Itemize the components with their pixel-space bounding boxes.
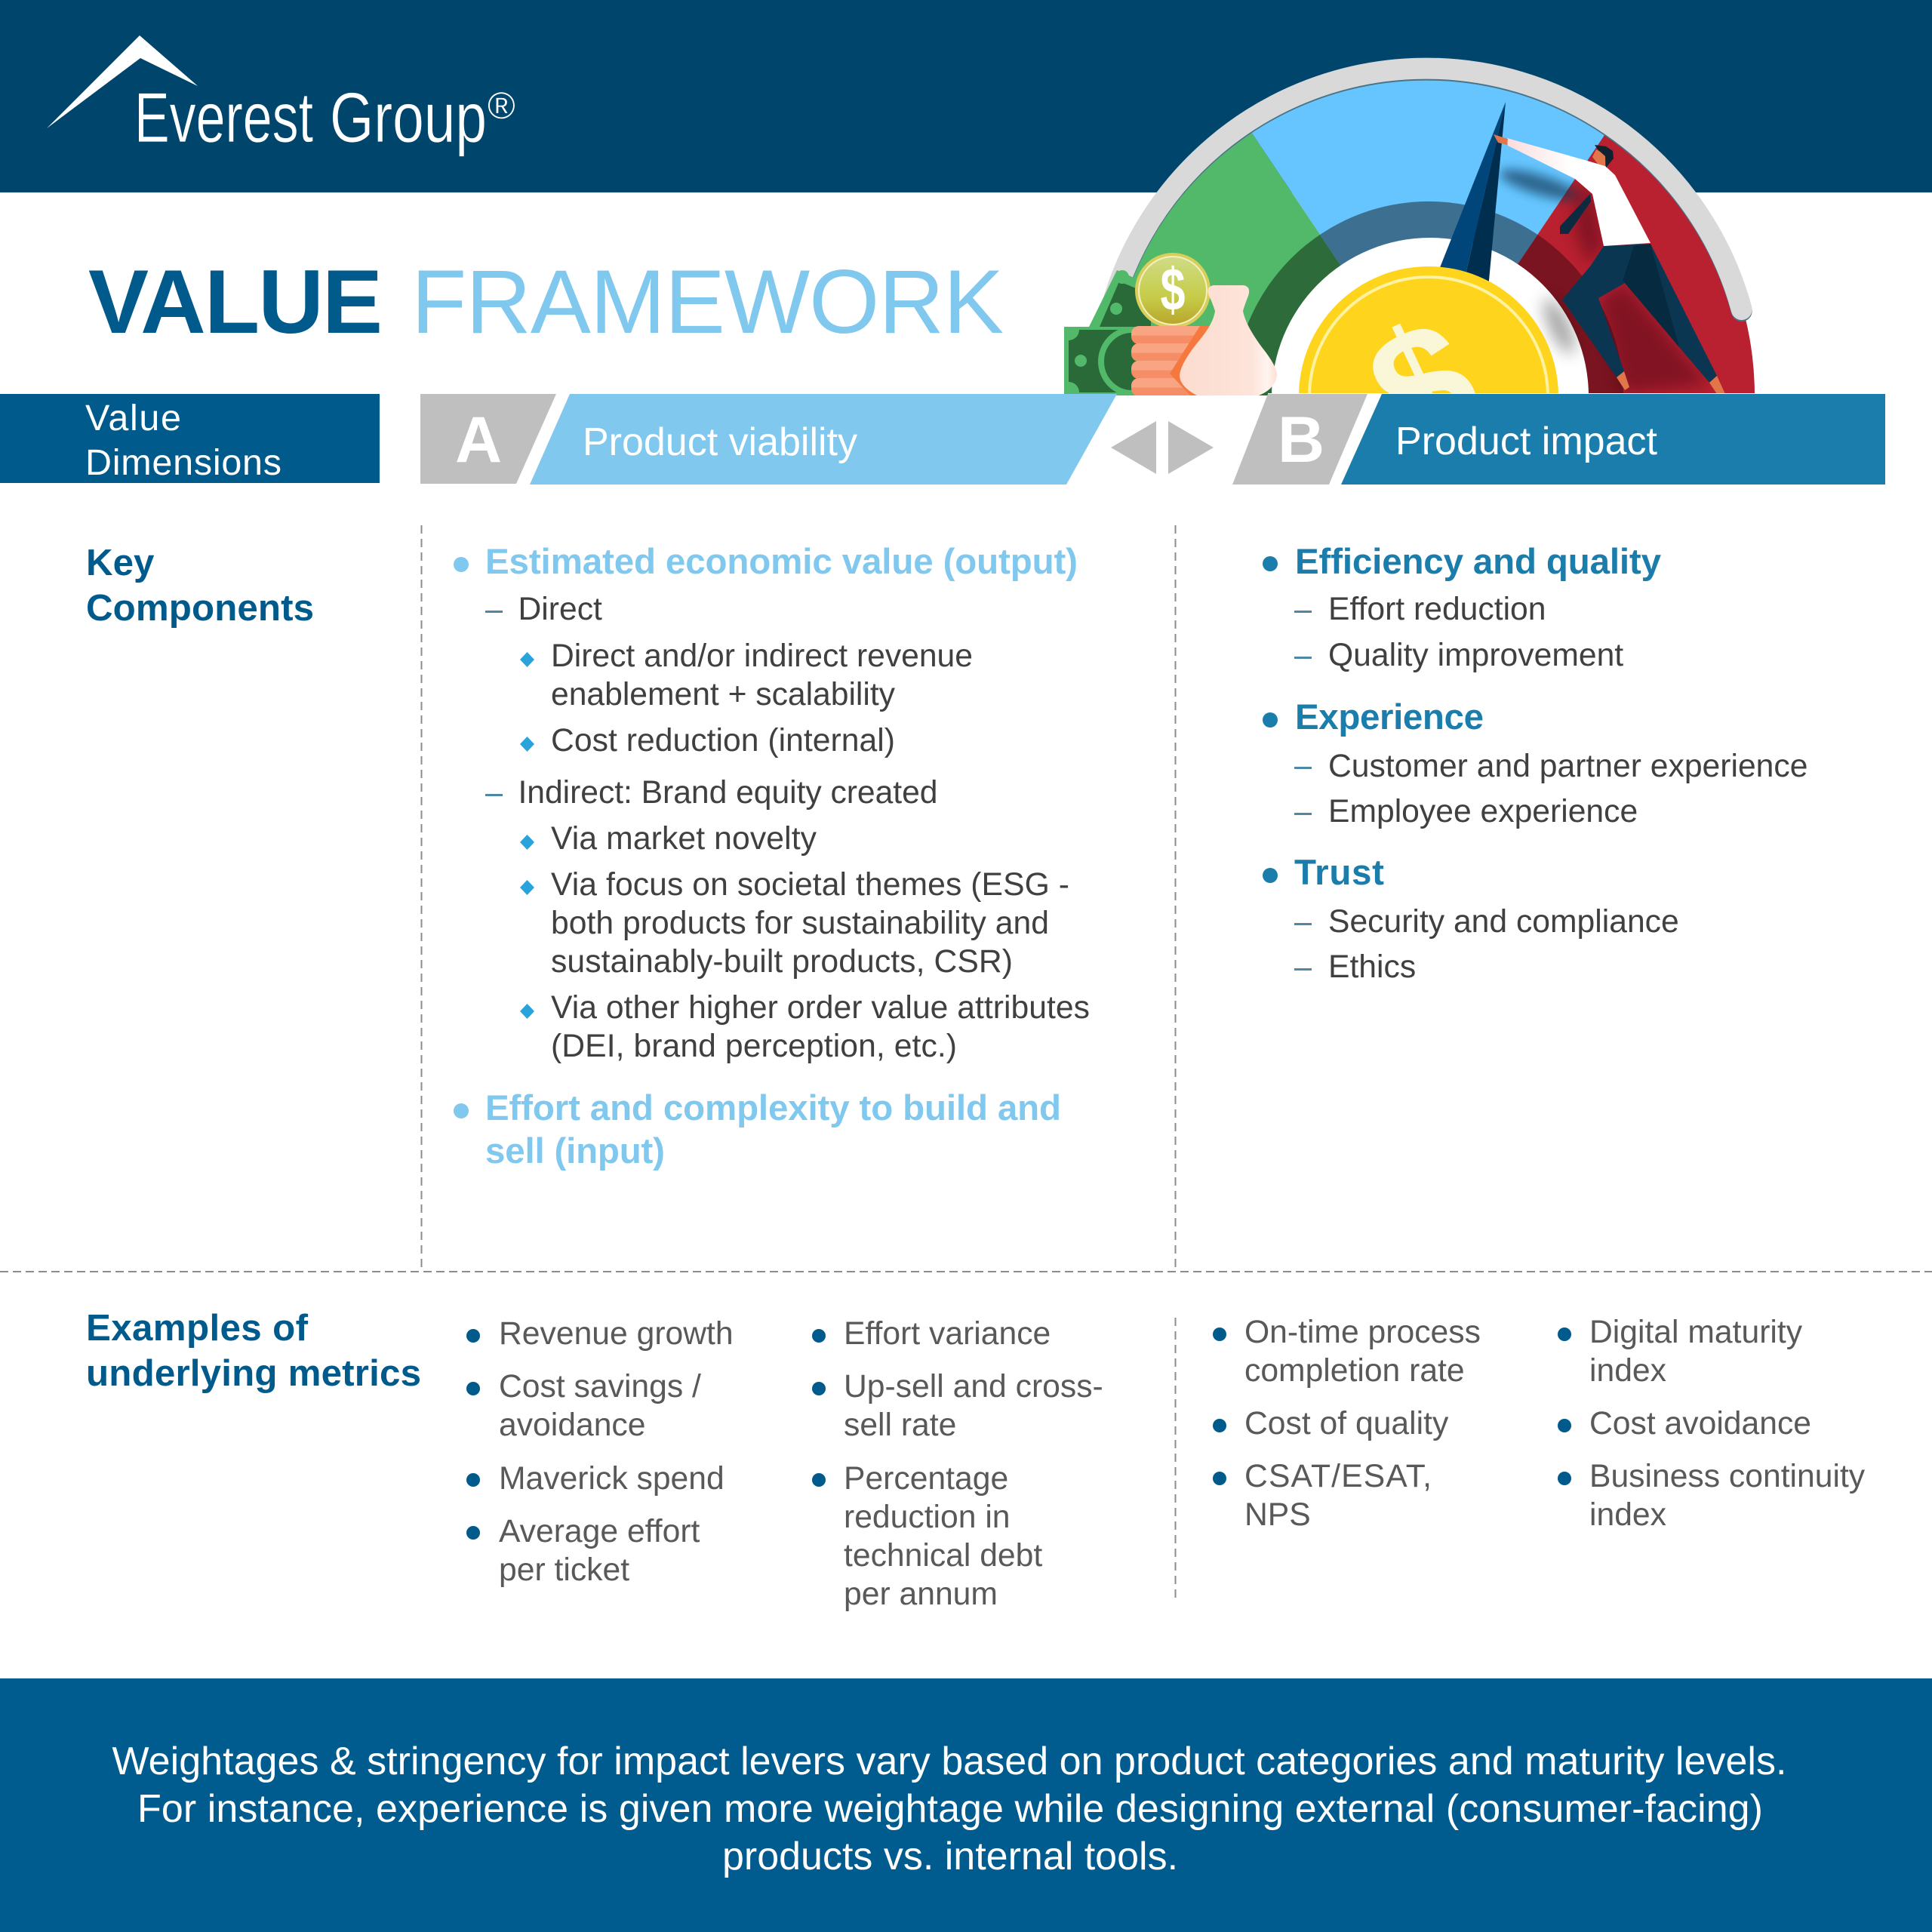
businessman bbox=[1494, 134, 1725, 394]
logo: Everest Group bbox=[47, 35, 515, 157]
logo wordmark: Everest bbox=[134, 78, 313, 157]
metric: csat bbox=[1213, 1458, 1432, 1533]
footer callout bbox=[0, 1678, 1932, 1932]
shoes bbox=[1617, 371, 1629, 390]
metric: csat: CSAT/ESAT, bbox=[1244, 1458, 1432, 1494]
metric: up-sell: Up-sell and cross- bbox=[844, 1368, 1103, 1404]
item: other attributes: (DEI, brand perception, etc.) bbox=[551, 1028, 957, 1064]
item: customer experience: Customer and partner experience bbox=[1328, 748, 1807, 784]
panel: viability metrics column 2 bbox=[812, 1315, 1103, 1612]
metric: up-sell: sell rate bbox=[844, 1407, 956, 1443]
key components label: Key bbox=[86, 542, 155, 583]
metric: average effort bbox=[466, 1513, 700, 1588]
value dimensions label: Dimensions bbox=[85, 442, 281, 483]
item: societal themes: both products for sustainability and bbox=[551, 905, 1049, 941]
item: security: Security and compliance bbox=[1328, 903, 1679, 940]
heading: efficiency and quality: Efficiency and quality bbox=[1295, 542, 1662, 582]
key components label bbox=[86, 542, 314, 629]
metric: on-time process: On-time process bbox=[1244, 1314, 1481, 1350]
key components label: Components bbox=[86, 587, 314, 629]
metric: business continuity: Business continuity bbox=[1589, 1458, 1866, 1494]
logo wordmark bbox=[134, 78, 487, 157]
gauge sector: blue bbox=[1251, 80, 1604, 235]
title bbox=[88, 251, 1004, 352]
banner: product viability bbox=[530, 394, 1117, 485]
item: employee experience: Employee experience bbox=[1328, 793, 1638, 829]
footer callout: For instance, experience is given more weightage while designing external (consumer-facing) bbox=[137, 1787, 1763, 1831]
face bbox=[1592, 149, 1605, 166]
title: FRAMEWORK bbox=[411, 251, 1004, 352]
dimension B: product impact bbox=[1232, 394, 1885, 485]
metric: cost avoidance: Cost avoidance bbox=[1589, 1405, 1811, 1441]
examples of metrics label: Examples of bbox=[86, 1307, 309, 1349]
panel: impact metrics column 2 bbox=[1558, 1314, 1866, 1533]
illustration: speedometer gauge with businessman bbox=[1064, 57, 1755, 395]
heading: estimated economic value: Estimated economic value (output) bbox=[485, 542, 1078, 582]
examples of metrics label: underlying metrics bbox=[86, 1352, 421, 1394]
heading: effort and complexity: sell (input) bbox=[485, 1131, 665, 1171]
metric: technical debt: Percentage bbox=[844, 1460, 1008, 1497]
footer callout: products vs. internal tools. bbox=[722, 1835, 1178, 1878]
hair bbox=[1595, 145, 1614, 168]
legs bbox=[1562, 244, 1717, 383]
registered mark: ® bbox=[488, 85, 515, 127]
metric: technical debt: technical debt bbox=[844, 1537, 1042, 1574]
item: other attributes bbox=[520, 989, 1090, 1064]
heading: effort and complexity bbox=[454, 1088, 1061, 1171]
metric: technical debt: per annum bbox=[844, 1576, 998, 1612]
badge A: A bbox=[455, 404, 502, 476]
metric: average effort: per ticket bbox=[499, 1552, 629, 1588]
metric: up-sell bbox=[812, 1368, 1103, 1443]
metric: effort variance: Effort variance bbox=[844, 1315, 1051, 1352]
metric: on-time process: completion rate bbox=[1244, 1352, 1465, 1389]
panel: impact metrics column 1 bbox=[1213, 1314, 1481, 1533]
torso and arm bbox=[1507, 138, 1651, 246]
icon: mountain peak bbox=[47, 35, 198, 128]
gauge inner band bbox=[1234, 202, 1623, 396]
panel: viability metrics column 1 bbox=[466, 1315, 734, 1588]
item: revenue enablement: Direct and/or indirect revenue bbox=[551, 638, 973, 674]
metric: cost of quality: Cost of quality bbox=[1244, 1405, 1449, 1441]
footer callout: Weightages & stringency for impact levers vary based on product categories and maturity levels. bbox=[112, 1740, 1787, 1783]
small dollar coin: $ bbox=[1161, 256, 1185, 323]
item: market novelty: Via market novelty bbox=[551, 820, 817, 857]
hub shadow bbox=[1539, 295, 1580, 357]
metric: digital maturity: Digital maturity bbox=[1589, 1314, 1803, 1350]
metric: technical debt bbox=[812, 1460, 1042, 1612]
logo wordmark: Group bbox=[330, 78, 487, 157]
badge A bbox=[420, 394, 556, 484]
metric: maverick spend: Maverick spend bbox=[499, 1460, 724, 1497]
metric: cost savings: Cost savings / bbox=[499, 1368, 701, 1404]
item: revenue enablement: enablement + scalability bbox=[551, 676, 896, 712]
item: indirect: Indirect: Brand equity created bbox=[518, 774, 937, 811]
dimension A: product viability bbox=[420, 394, 1117, 485]
hand bbox=[1494, 134, 1508, 145]
leg shading bbox=[1623, 244, 1679, 347]
metric: business continuity: index bbox=[1589, 1497, 1666, 1533]
item: societal themes: sustainably-built products, CSR) bbox=[551, 943, 1013, 980]
metric: csat: NPS bbox=[1244, 1497, 1311, 1533]
gold coin: $ bbox=[1343, 281, 1505, 489]
gold coin bbox=[1299, 266, 1558, 393]
item: cost reduction: Cost reduction (internal) bbox=[551, 722, 895, 758]
tie bbox=[1560, 194, 1591, 234]
examples of metrics label bbox=[86, 1307, 421, 1394]
item: societal themes bbox=[520, 866, 1069, 980]
panel: product viability components bbox=[454, 542, 1090, 1171]
item: effort reduction: Effort reduction bbox=[1328, 591, 1546, 627]
item: direct: Direct bbox=[518, 591, 602, 627]
gauge white hub bbox=[1272, 238, 1589, 393]
heading: effort and complexity: Effort and complexity to build and bbox=[485, 1088, 1061, 1128]
item: societal themes: Via focus on societal themes (ESG - bbox=[551, 866, 1069, 903]
heading: experience: Experience bbox=[1295, 697, 1484, 737]
title: VALUE bbox=[88, 251, 383, 352]
double arrows between dimensions bbox=[1111, 421, 1214, 474]
metric: on-time process bbox=[1213, 1314, 1481, 1389]
gauge grey rim bbox=[1106, 69, 1742, 332]
banner: product impact bbox=[1341, 394, 1885, 485]
metric: cost savings: avoidance bbox=[499, 1407, 645, 1443]
gauge sector: green bbox=[1134, 133, 1340, 326]
arm shadow bbox=[1497, 163, 1582, 207]
gauge sector: red bbox=[1518, 136, 1755, 393]
banner: product viability: Product viability bbox=[583, 420, 857, 464]
badge B bbox=[1232, 394, 1367, 485]
heading: trust: Trust bbox=[1294, 853, 1384, 893]
header band bbox=[0, 0, 1932, 192]
item: quality improvement: Quality improvement bbox=[1328, 637, 1623, 673]
value dimensions label bbox=[0, 394, 380, 483]
metric: revenue growth: Revenue growth bbox=[499, 1315, 734, 1352]
value dimensions label: Value bbox=[85, 398, 181, 438]
metric: digital maturity bbox=[1558, 1314, 1803, 1389]
banner: product impact: Product impact bbox=[1395, 420, 1658, 463]
badge B: B bbox=[1278, 404, 1324, 476]
item: other attributes: Via other higher order value attributes bbox=[551, 989, 1090, 1026]
gauge rim inner edge bbox=[1133, 78, 1752, 321]
item: ethics: Ethics bbox=[1328, 949, 1416, 985]
metric: technical debt: reduction in bbox=[844, 1499, 1011, 1535]
needle bbox=[1438, 102, 1506, 288]
metric: cost savings bbox=[466, 1368, 701, 1443]
coin stack bbox=[1131, 326, 1209, 395]
metric: business continuity bbox=[1558, 1458, 1866, 1533]
shadows cast by businessman bbox=[1574, 181, 1709, 394]
money: back bill bbox=[1089, 270, 1151, 327]
panel: product impact components bbox=[1263, 542, 1807, 985]
money: front bill bbox=[1064, 327, 1137, 395]
metric: average effort: Average effort bbox=[499, 1513, 700, 1549]
item: revenue enablement bbox=[520, 638, 973, 712]
metric: digital maturity: index bbox=[1589, 1352, 1666, 1389]
small dollar coin bbox=[1135, 253, 1211, 328]
money bag bbox=[1180, 285, 1277, 395]
